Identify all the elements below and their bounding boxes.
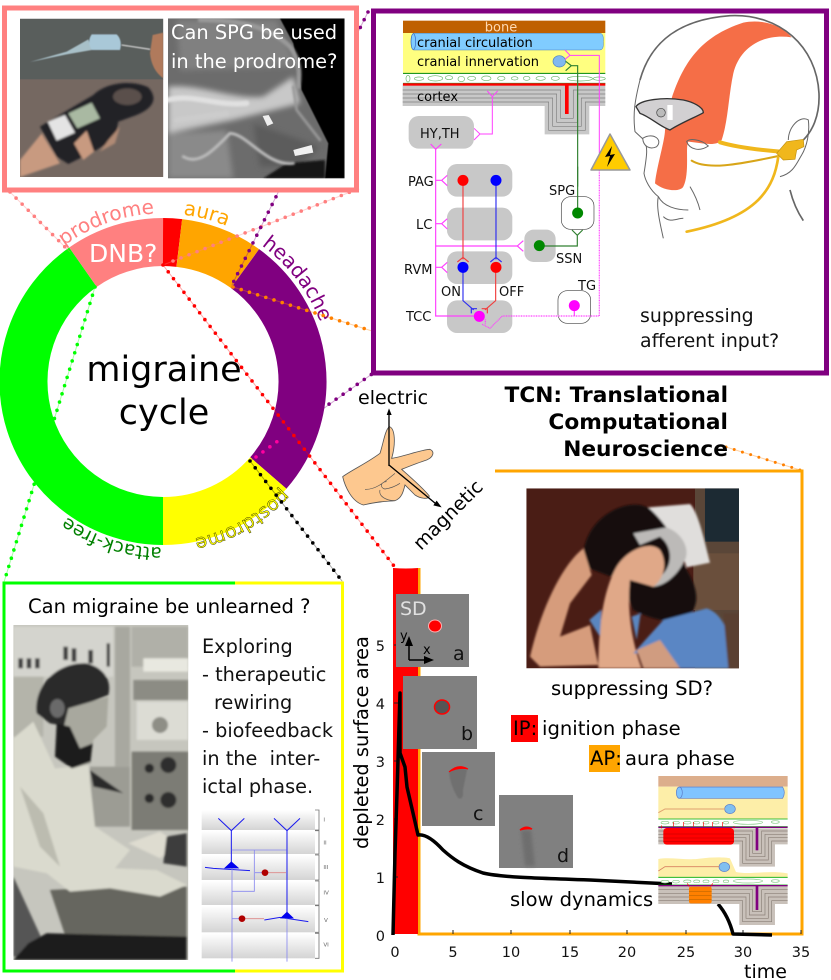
depleted area curve — [393, 693, 772, 935]
SD snapshot a: x — [423, 643, 431, 658]
exploring text: rewiring — [214, 691, 292, 714]
SD snapshot b: b — [461, 723, 473, 745]
ring labels: headache — [263, 234, 329, 321]
translational title: TCN: Translational — [505, 383, 728, 408]
IP legend: ignition phase — [542, 717, 681, 740]
ring labels — [59, 202, 329, 560]
ring centre title — [86, 350, 242, 433]
circuit labels: OFF — [499, 285, 524, 300]
icon: high voltage warning — [591, 134, 630, 170]
photo: biofeedback subject — [13, 625, 188, 960]
suppressing SD label: suppressing SD? — [551, 677, 713, 700]
cortical layer diagram: VI — [323, 943, 329, 949]
cortex inset diagrams — [658, 776, 788, 925]
circuit labels — [404, 127, 596, 325]
suppressing afferent input question — [640, 305, 779, 352]
diagram labels top: cranial circulation — [417, 36, 533, 51]
axis labels: 0 — [390, 945, 400, 961]
SD snapshot a — [396, 594, 469, 667]
photo: skull x-ray — [168, 18, 345, 178]
SD snapshot c — [422, 752, 495, 826]
IP legend: IP: — [513, 717, 537, 740]
circuit labels: TG — [577, 279, 596, 294]
panel: interictal unlearning — [4, 583, 342, 971]
SD snapshot c: c — [473, 803, 483, 825]
axis labels: 1 — [376, 871, 385, 887]
head illustration — [634, 16, 819, 238]
ring labels: postdrome — [196, 486, 289, 548]
SD snapshot b — [403, 676, 477, 749]
axis labels: 5 — [448, 945, 458, 961]
y axis title: depleted surface area — [350, 636, 373, 849]
panel: cortical spreading depression chart — [350, 471, 810, 980]
translational title: Computational — [548, 410, 728, 435]
circuit labels: SSN — [556, 252, 582, 267]
axis labels: 35 — [792, 945, 810, 961]
circuit labels: SPG — [549, 184, 575, 199]
axis labels: 25 — [677, 945, 695, 961]
SD snapshot a: a — [453, 643, 465, 665]
cortical layer diagram: V — [324, 918, 328, 924]
DNB label: DNB? — [89, 239, 157, 268]
axis labels: 10 — [502, 945, 520, 961]
SD snapshot d — [499, 795, 573, 868]
exploring text — [202, 635, 334, 798]
diagram labels top: cortex — [417, 90, 458, 105]
exploring text: Exploring — [202, 635, 293, 658]
circuit labels: RVM — [404, 263, 432, 278]
cortical layer diagram: I — [323, 818, 325, 824]
SD snapshot d: d — [557, 845, 569, 867]
cortical layer diagram: III — [323, 865, 329, 871]
panel heading: Can migraine be unlearned ? — [28, 595, 310, 618]
axis ticks — [394, 645, 801, 934]
AP legend: aura phase — [625, 747, 735, 770]
exploring text: in the inter- — [202, 747, 320, 770]
migraine cycle ring — [23, 242, 303, 521]
meninges and cortex layers — [403, 21, 605, 187]
cortical layer diagram: II — [323, 840, 327, 846]
axis labels: 20 — [618, 945, 636, 961]
axis labels: 0 — [376, 929, 385, 945]
axis labels: 5 — [376, 639, 385, 655]
exploring text: - biofeedback — [202, 719, 334, 742]
photo: implant and stimulator — [20, 19, 163, 177]
SD snapshot a: y — [400, 629, 408, 644]
axis labels: 15 — [561, 945, 579, 961]
cortical layer diagram — [202, 810, 329, 962]
ring labels: prodrome — [59, 202, 153, 248]
SD snapshot a: SD — [400, 598, 427, 620]
circuit labels: PAG — [408, 175, 434, 190]
axis labels: 3 — [376, 755, 385, 771]
translational title: Neuroscience — [563, 437, 728, 462]
ring centre title: migraine — [86, 350, 242, 390]
panel: prodrome SPG — [4, 8, 356, 190]
icon: right hand rule — [343, 408, 442, 507]
diagram labels top — [417, 20, 539, 105]
x-ray question — [171, 21, 337, 73]
magenta and green pathways — [474, 50, 599, 187]
dotted connectors — [4, 12, 800, 582]
circuit labels: LC — [416, 218, 432, 233]
circuit labels: TCC — [405, 310, 431, 325]
ring centre title: cycle — [119, 393, 209, 433]
AP legend — [589, 745, 735, 772]
IP legend — [511, 715, 681, 742]
ring labels: attack-free — [64, 518, 161, 560]
suppressing afferent input question: afferent input? — [640, 330, 779, 352]
diagram labels top: bone — [485, 20, 517, 36]
circuit labels: HY,TH — [420, 127, 460, 142]
translational title — [505, 383, 728, 462]
slow dynamics label: slow dynamics — [510, 888, 653, 911]
exploring text: ictal phase. — [202, 775, 313, 798]
diagram labels top: cranial innervation — [417, 55, 539, 70]
photo: TMS device — [526, 488, 739, 668]
suppressing afferent input question: suppressing — [640, 305, 754, 327]
axis labels: 2 — [376, 813, 385, 829]
x-ray question: Can SPG be used — [171, 21, 337, 44]
ring labels: aura — [184, 204, 228, 226]
panel: headache circuit — [374, 11, 826, 373]
brainstem circuit — [409, 116, 599, 333]
cortical layer diagram: IV — [323, 891, 329, 897]
magnetic label: magnetic — [409, 476, 488, 555]
axis labels — [376, 639, 810, 961]
ignition band — [393, 568, 418, 934]
x-ray question: in the prodrome? — [171, 50, 337, 73]
circuit labels: ON — [441, 285, 461, 300]
axis labels: 4 — [376, 697, 385, 713]
electric label: electric — [358, 387, 428, 409]
AP legend: AP: — [590, 747, 622, 770]
exploring text: - therapeutic — [202, 663, 326, 686]
axis labels: 30 — [734, 945, 752, 961]
